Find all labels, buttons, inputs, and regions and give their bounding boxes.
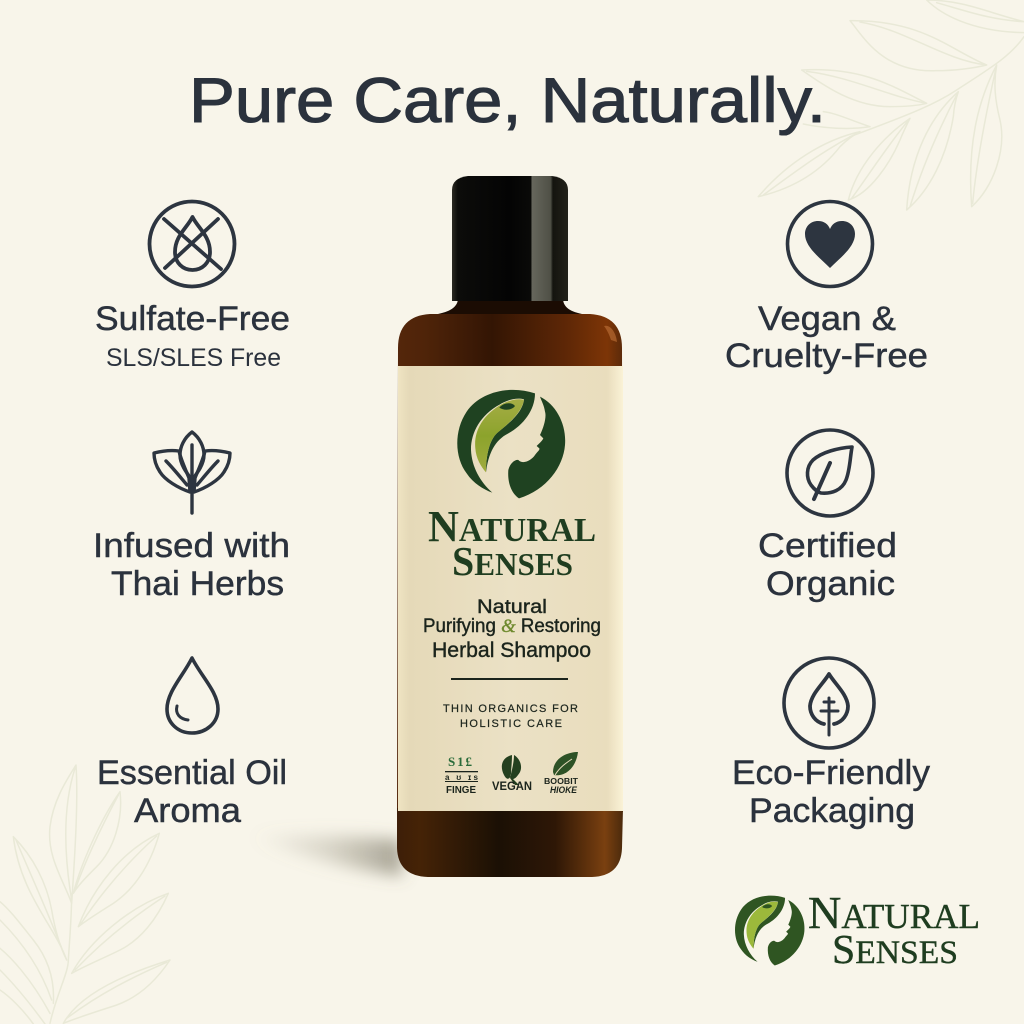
brand wordmark bottom right bbox=[808, 887, 980, 972]
decorative leaf branch: bottom left bbox=[0, 765, 170, 1024]
text: essential oil aroma: Essential Oil bbox=[97, 754, 287, 792]
bottle gloss highlight bbox=[604, 326, 617, 342]
text: essential oil aroma: Aroma bbox=[134, 792, 241, 830]
bottle base bbox=[397, 808, 623, 877]
text: certified organic bbox=[758, 527, 897, 603]
tagline bbox=[443, 703, 578, 730]
product name: Natural bbox=[477, 597, 547, 618]
brand wordmark bottom right: NATURAL bbox=[808, 887, 980, 938]
product bottle bbox=[397, 176, 623, 877]
title: Pure Care, Naturally. bbox=[189, 66, 826, 136]
text: infused with thai herbs: Thai Herbs bbox=[111, 565, 284, 603]
text: certified organic: Organic bbox=[766, 565, 895, 603]
bottle neck bbox=[438, 298, 582, 314]
icon: certified organic leaf bbox=[787, 430, 873, 516]
icon: essential oil drop bbox=[167, 658, 218, 733]
panel: left features bbox=[93, 202, 290, 830]
text: eco-friendly packaging: Eco-Friendly bbox=[732, 754, 930, 792]
product name: Purifying & Restoring bbox=[423, 616, 601, 637]
badge: sulfate free: FINGE bbox=[446, 785, 476, 796]
tagline: THIN ORGANICS FOR bbox=[443, 703, 578, 715]
label divider bbox=[451, 678, 568, 680]
bottle cap bbox=[452, 176, 568, 301]
icon: thai herbs sprig bbox=[154, 432, 230, 513]
label badges bbox=[445, 752, 579, 796]
bottle shadow bbox=[250, 835, 402, 876]
text: eco-friendly packaging: Packaging bbox=[749, 792, 915, 830]
brand wordmark bottom right: SENSES bbox=[832, 926, 958, 972]
product name bbox=[423, 597, 601, 662]
brand wordmark on label bbox=[428, 502, 596, 584]
tagline: HOLISTIC CARE bbox=[460, 718, 562, 730]
text: infused with thai herbs: Infused with bbox=[93, 527, 290, 565]
text: essential oil aroma bbox=[97, 754, 287, 830]
icon: sulfate-free crossed drop bbox=[150, 202, 234, 286]
badge: herbal leaf bbox=[544, 752, 579, 795]
bottle body bbox=[397, 314, 623, 812]
text: eco-friendly packaging bbox=[732, 754, 930, 830]
label bbox=[398, 366, 623, 811]
badge: vegan: VEGAN bbox=[492, 779, 532, 793]
icon: eco-friendly leaf bbox=[784, 658, 874, 748]
badge: herbal leaf: HIOKE bbox=[550, 785, 578, 795]
text: infused with thai herbs bbox=[93, 527, 290, 603]
brand wordmark on label: SENSES bbox=[452, 538, 573, 584]
badge: herbal leaf: BOOBIT bbox=[544, 776, 579, 786]
text: certified organic: Certified bbox=[758, 527, 897, 565]
badge: sulfate free: S1£ bbox=[448, 754, 472, 769]
text: vegan and cruelty-free bbox=[725, 300, 928, 375]
text: vegan and cruelty-free: Cruelty-Free bbox=[725, 337, 928, 375]
brand logo bottom right bbox=[735, 896, 804, 965]
decorative leaf branch: top right bbox=[758, 0, 1024, 210]
text: sulfate-free: SLS/SLES Free bbox=[106, 344, 281, 372]
text: sulfate-free: Sulfate-Free bbox=[95, 300, 290, 338]
icon: vegan heart bbox=[788, 202, 872, 286]
text: vegan and cruelty-free: Vegan & bbox=[758, 300, 896, 338]
brand logo on label bbox=[457, 390, 565, 498]
brand wordmark on label: NATURAL bbox=[428, 502, 596, 551]
text: sulfate-free bbox=[95, 300, 290, 372]
badge: sulfate free: a ʊ ɪs bbox=[445, 773, 479, 782]
panel: right features bbox=[725, 202, 930, 830]
product name: Herbal Shampoo bbox=[432, 639, 591, 662]
badge: sulfate free bbox=[445, 754, 479, 796]
